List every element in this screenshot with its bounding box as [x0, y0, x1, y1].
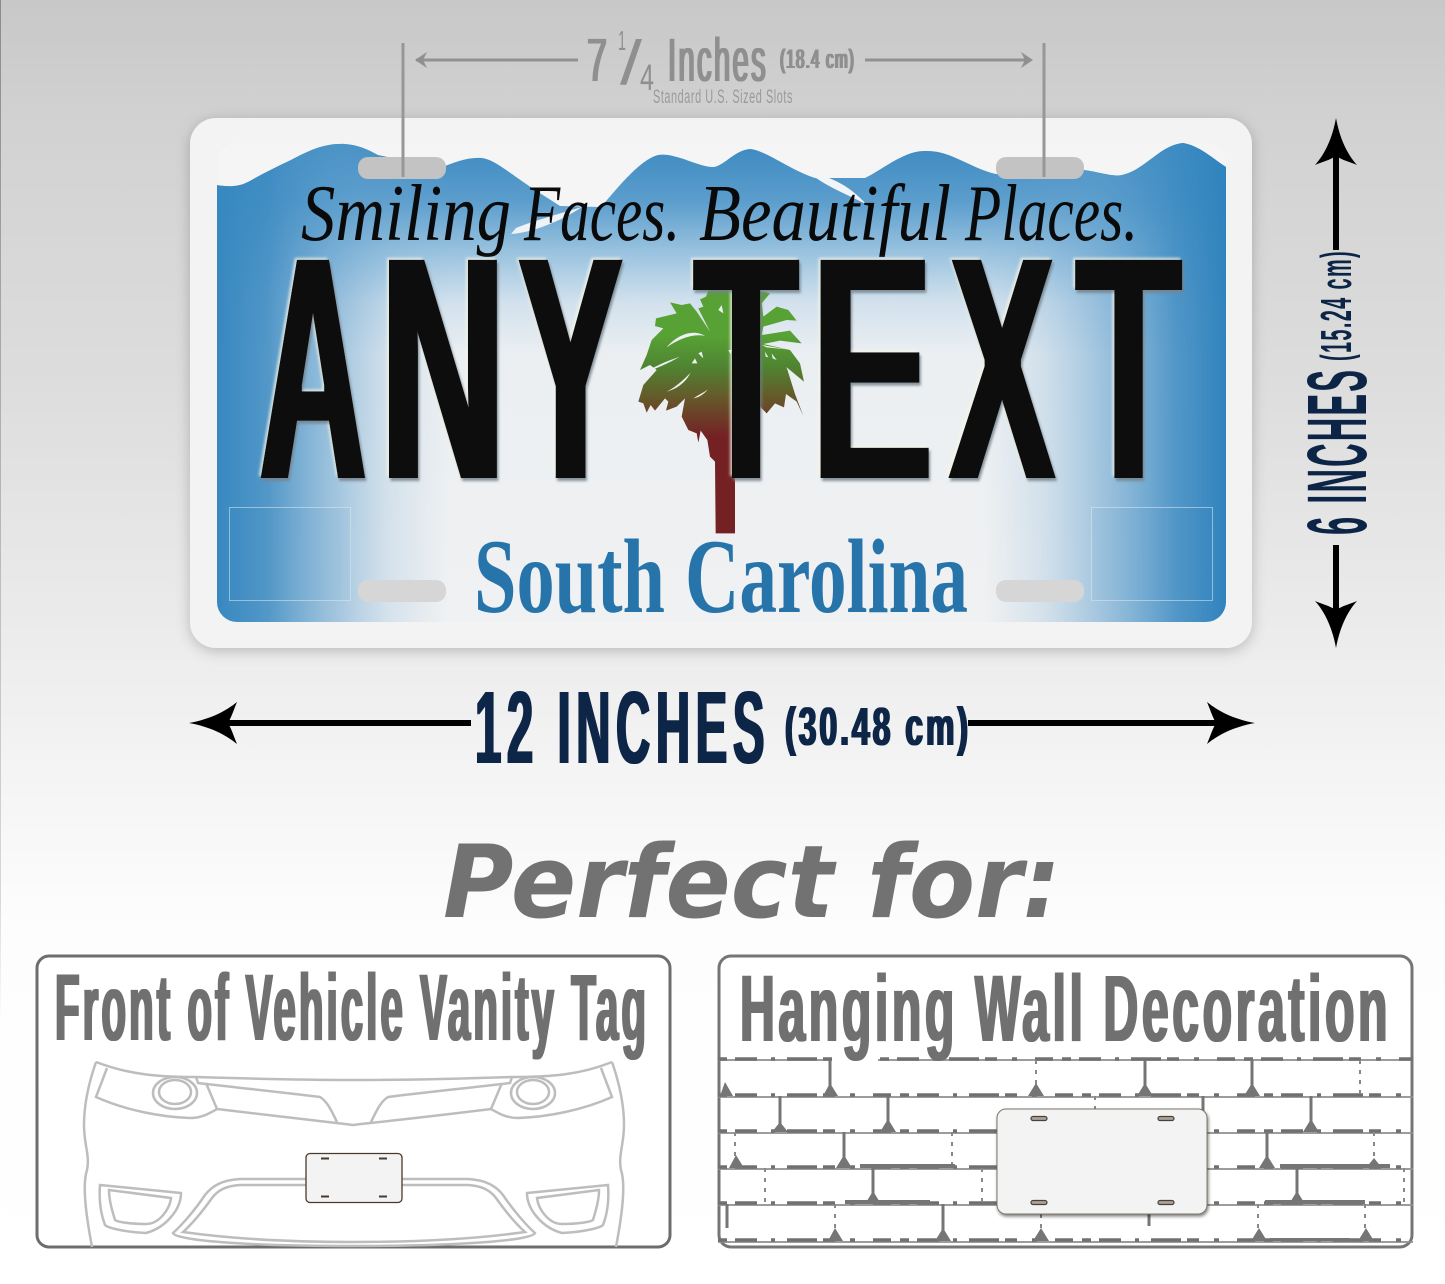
icon: palm tree [638, 286, 804, 533]
panel: wall decoration [718, 956, 1413, 1247]
label: 30.48 cm: (30.48 cm) [785, 697, 971, 757]
mounting slots [358, 157, 1084, 602]
caption: Standard U.S. Sized Slots [653, 87, 793, 108]
label: 7 1/4 inches: 1 [618, 25, 626, 56]
plate text: ANY TEXT: N [381, 187, 505, 551]
height dimension: (15.24 cm) [1312, 250, 1361, 361]
slogan [301, 170, 1138, 258]
arrow right [865, 52, 1033, 68]
label: 7 1/4 inches: / [620, 29, 643, 98]
heading: perfect for: Perfect for: [443, 823, 1061, 941]
arrow up [1315, 118, 1357, 250]
slogan: Faces. [523, 170, 680, 258]
plate inner panel [216, 143, 1226, 622]
small plate [306, 1154, 402, 1202]
arrow left [189, 702, 471, 744]
panel frame [719, 956, 1412, 1247]
arrow right [968, 702, 1255, 744]
slogan: Smiling [301, 170, 511, 258]
label: 7 1/4 inches: Inches [668, 26, 768, 94]
panel frame [37, 956, 670, 1247]
slogan: Places. [964, 170, 1138, 258]
white streak left [511, 207, 582, 234]
label: 7 1/4 inches: (18.4 cm) [780, 44, 855, 74]
panel: front of vehicle [37, 955, 670, 1247]
label: 7 1/4 inches: 4 [640, 57, 654, 98]
license plate [190, 118, 1252, 648]
icon: car front outline [84, 1062, 624, 1247]
arrow down [1315, 545, 1357, 648]
white streak right [816, 178, 865, 204]
brick wall [718, 1059, 1413, 1242]
slogan: Beautiful [699, 170, 951, 258]
width dimension: 12 INCHES [475, 670, 770, 785]
blue mountains background [217, 143, 1226, 462]
slot guide lines [403, 43, 1044, 177]
state name [474, 518, 968, 635]
plate text: ANY TEXT: E [810, 187, 934, 551]
arrow left [415, 52, 578, 68]
text: Front of Vehicle Vanity Tag [55, 955, 649, 1061]
plate text: ANY TEXT: X [948, 187, 1056, 551]
label: 7 1/4 inches [587, 25, 855, 98]
plate text: ANY TEXT [260, 187, 1183, 551]
plate text: ANY TEXT: Y [518, 187, 624, 551]
height dimension: 6 INCHES [1290, 368, 1384, 535]
plate text: ANY TEXT: T [1075, 187, 1183, 551]
plate text: ANY TEXT: A [260, 187, 366, 551]
plate base [190, 118, 1252, 648]
slot spacing dimension [403, 25, 1044, 177]
label: 7 1/4 inches: 7 [587, 26, 607, 94]
sticker box left [230, 508, 350, 600]
plate text: ANY TEXT: T [693, 187, 800, 551]
sticker box right [1092, 508, 1212, 600]
state name: Carolina [685, 518, 968, 635]
hanging plate [997, 1109, 1207, 1214]
width dimension [189, 670, 1255, 785]
state name: South [474, 518, 665, 635]
blue side fade [216, 143, 1226, 622]
